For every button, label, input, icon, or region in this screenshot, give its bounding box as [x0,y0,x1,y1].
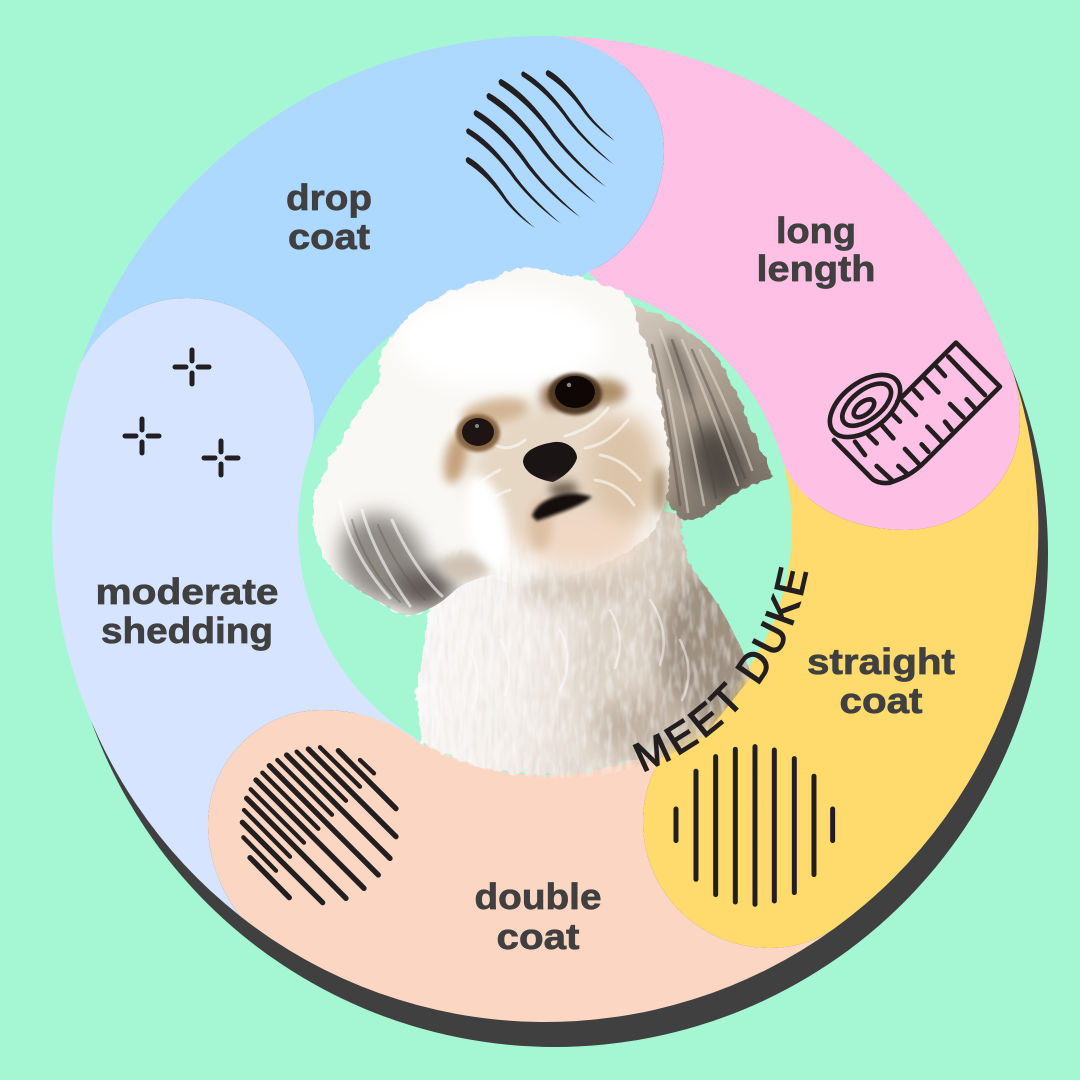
face markings [440,379,666,573]
label: moderate shedding: shedding [101,610,273,651]
head glow [395,292,605,388]
dog body [417,500,752,778]
photo: white fluffy dog Duke [313,267,780,800]
panel: drop coat [80,36,664,467]
face shading [469,400,661,568]
right ear [630,305,773,522]
icon: measuring tape [819,343,1000,483]
right eye [548,373,602,415]
label: double coat: coat [496,916,580,957]
panel: moderate shedding [52,298,422,916]
label: long length [756,210,876,289]
head [379,267,669,587]
label: long length: length [756,248,876,289]
left ear shading [324,498,490,618]
panel: double coat [208,710,835,1022]
panel: straight coat [643,370,1038,948]
right ear shading [652,330,753,512]
mouth [532,480,592,521]
label: moderate shedding [96,571,278,651]
left ear [313,383,510,615]
icon: sparkles [125,350,238,475]
icon: straight vertical lines [676,747,833,904]
icon: diagonal double-coat lines [242,747,396,903]
nose [523,442,577,482]
icon: wavy hair strands [466,70,615,228]
label: moderate shedding: moderate [96,571,278,612]
left eye [456,414,500,452]
label: straight coat: straight [807,641,955,682]
body shading [418,513,750,778]
curved title: MEET DUKE: MEET DUKE [632,566,808,772]
label: straight coat [807,641,955,721]
label: double coat: double [474,876,602,917]
label: drop coat: drop [286,177,372,218]
label: drop coat [286,177,372,257]
label: drop coat: coat [288,216,370,257]
centre circle [298,281,792,775]
fur strands [470,408,689,710]
label: long length: long [776,210,856,251]
label: straight coat: coat [840,680,923,721]
panel: long length [555,36,1020,530]
label: double coat [474,876,602,957]
